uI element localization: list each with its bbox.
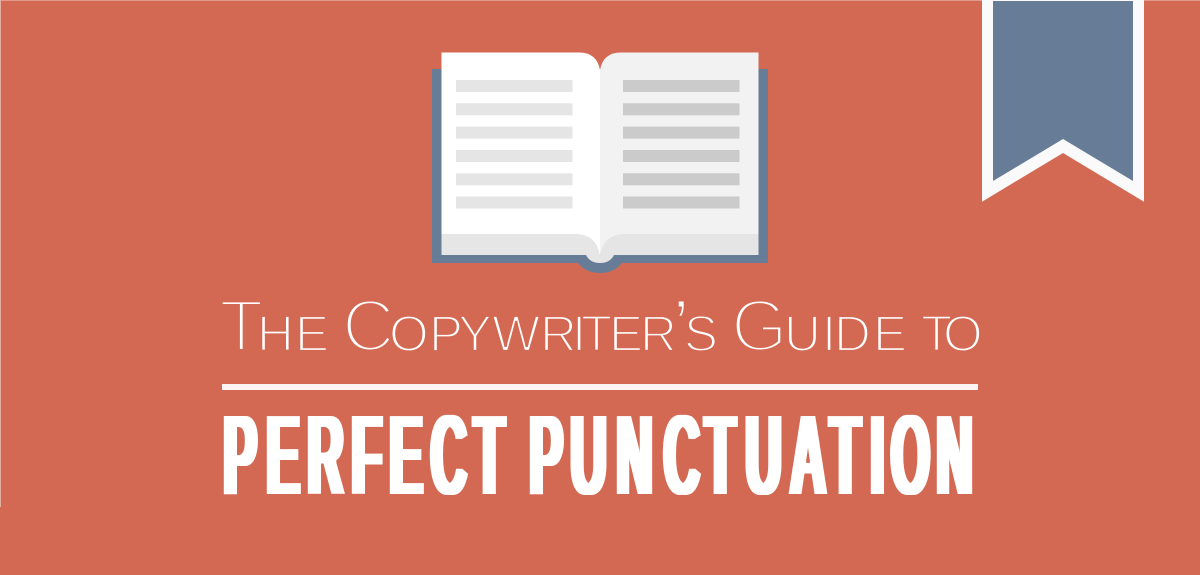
title line: The Copywriter's Guide to: THE COPYWRITER’S GUIDE TO (219, 286, 983, 367)
icon: bookmark ribbon (982, 0, 1144, 202)
divider rule (222, 384, 978, 390)
icon: open book (432, 52, 768, 273)
left page text lines (456, 80, 572, 208)
heading: Perfect Punctuation: PERFECT PUNCTUATION (224, 390, 973, 520)
right page text lines (623, 80, 740, 208)
